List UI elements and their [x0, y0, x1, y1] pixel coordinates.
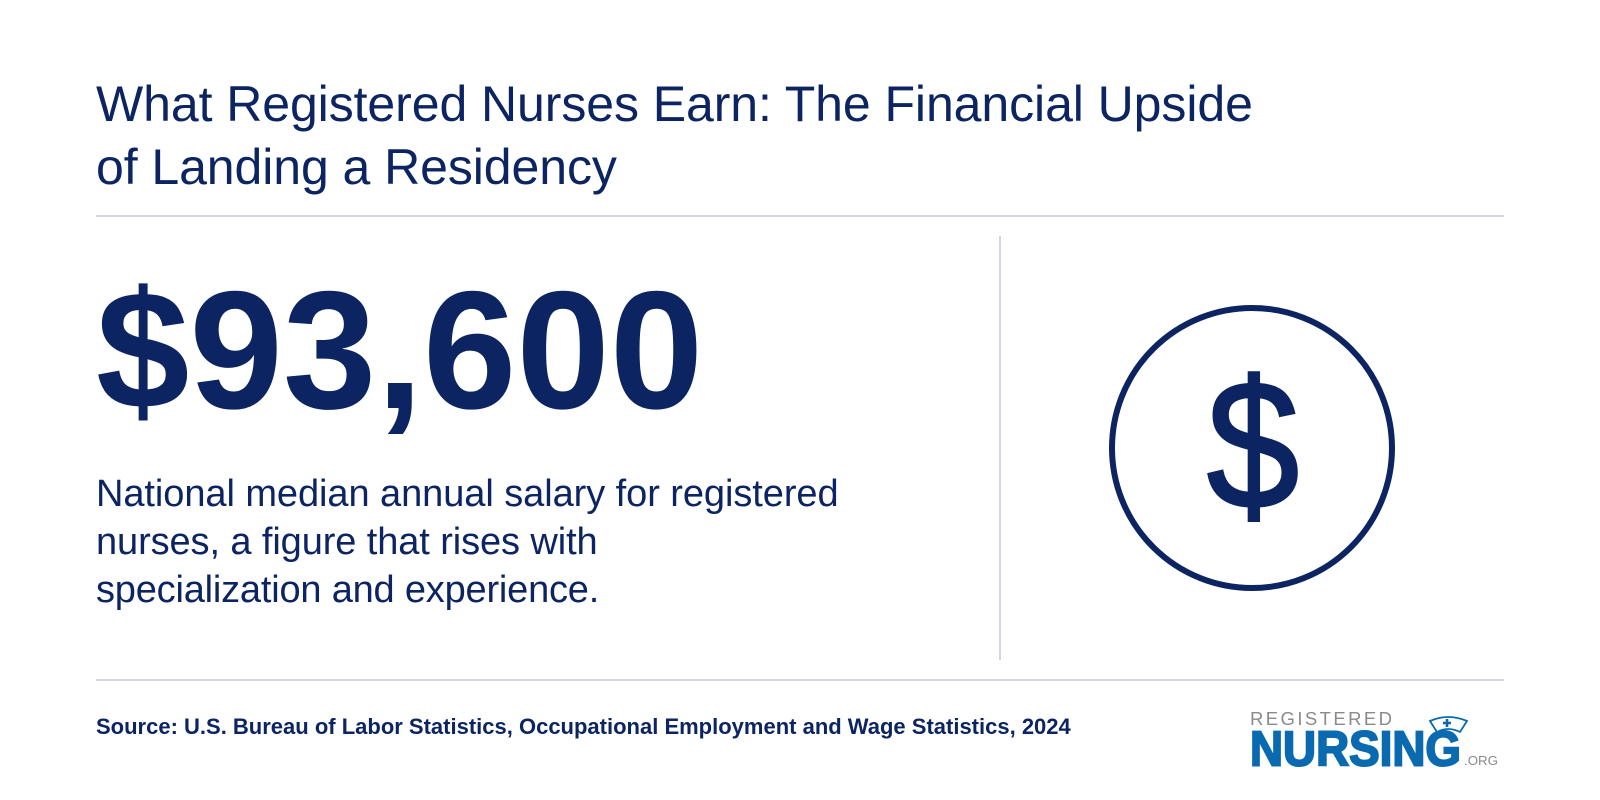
source: Source: U.S. Bureau of Labor Statistics, Occupational Employment and Wage Statistics, 2024 — [96, 714, 1071, 739]
icon: dollar in circle: $ — [1207, 344, 1299, 548]
title — [96, 76, 1253, 195]
title: What Registered Nurses Earn: The Financial Upside — [96, 76, 1253, 132]
icon: dollar in circle — [1109, 305, 1395, 591]
logo: .ORG — [1464, 753, 1498, 768]
big statistic: $93,600 — [96, 256, 703, 444]
description: National median annual salary for registered — [96, 473, 839, 515]
description — [96, 473, 839, 611]
description: specialization and experience. — [96, 569, 599, 611]
description: nurses, a figure that rises with — [96, 521, 598, 563]
title: of Landing a Residency — [96, 139, 617, 195]
logo: REGISTERED — [1250, 708, 1392, 729]
logo: NURSING — [1250, 722, 1461, 775]
